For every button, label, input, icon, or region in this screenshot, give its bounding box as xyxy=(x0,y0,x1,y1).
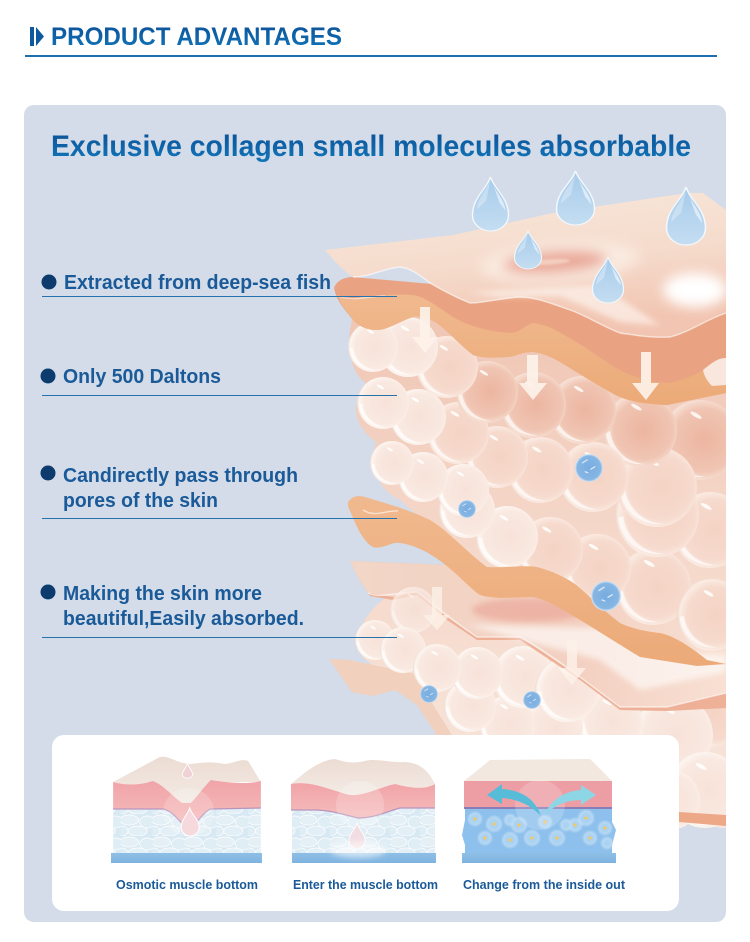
bottom orange strip of skin xyxy=(679,812,726,826)
ripple on the sheet xyxy=(482,242,638,285)
skin base mass xyxy=(349,300,726,830)
lower orange band xyxy=(348,496,726,666)
point 3: Candirectly pass through xyxy=(63,465,298,487)
middle bubble field xyxy=(348,317,748,651)
top skin sheets xyxy=(325,193,727,405)
step labels xyxy=(116,878,626,892)
collagen balls xyxy=(420,454,621,709)
step 1: osmotic muscle bottom xyxy=(111,757,262,863)
point 4: beautiful,Easily absorbed. xyxy=(63,608,304,630)
arrows: absorption direction xyxy=(412,307,659,685)
point 4 xyxy=(40,583,397,638)
point 2 xyxy=(40,366,397,396)
point 1: Extracted from deep-sea fish xyxy=(64,272,331,294)
point 3: pores of the skin xyxy=(63,490,218,512)
step 3: change from the inside out xyxy=(462,759,616,863)
lower skin sheet xyxy=(350,561,726,711)
icon: right teal arrow xyxy=(544,785,596,816)
point 4: Making the skin more xyxy=(63,583,262,605)
icon: header play marker xyxy=(30,27,44,46)
point 1 xyxy=(42,272,397,297)
section header xyxy=(25,23,717,57)
step labels: Osmotic muscle bottom xyxy=(116,878,258,892)
heading: product advantages: PRODUCT ADVANTAGES xyxy=(51,23,342,51)
point 2: Only 500 Daltons xyxy=(63,366,221,388)
point 3 xyxy=(40,465,397,519)
title: Exclusive collagen small molecules absorbable xyxy=(51,130,691,163)
left ghost bubbles xyxy=(355,587,461,692)
lower bubbles xyxy=(444,646,744,830)
panel: absorption steps xyxy=(52,735,679,911)
water droplets xyxy=(472,171,706,303)
small left skin sheet xyxy=(329,659,455,740)
illustration: skin cross-section xyxy=(325,171,748,830)
right end bubble xyxy=(677,586,716,648)
icon: left teal arrow xyxy=(487,784,541,816)
step labels: Enter the muscle bottom xyxy=(293,878,438,892)
step 2: enter the muscle bottom xyxy=(291,759,436,863)
step labels: Change from the inside out xyxy=(463,878,626,892)
